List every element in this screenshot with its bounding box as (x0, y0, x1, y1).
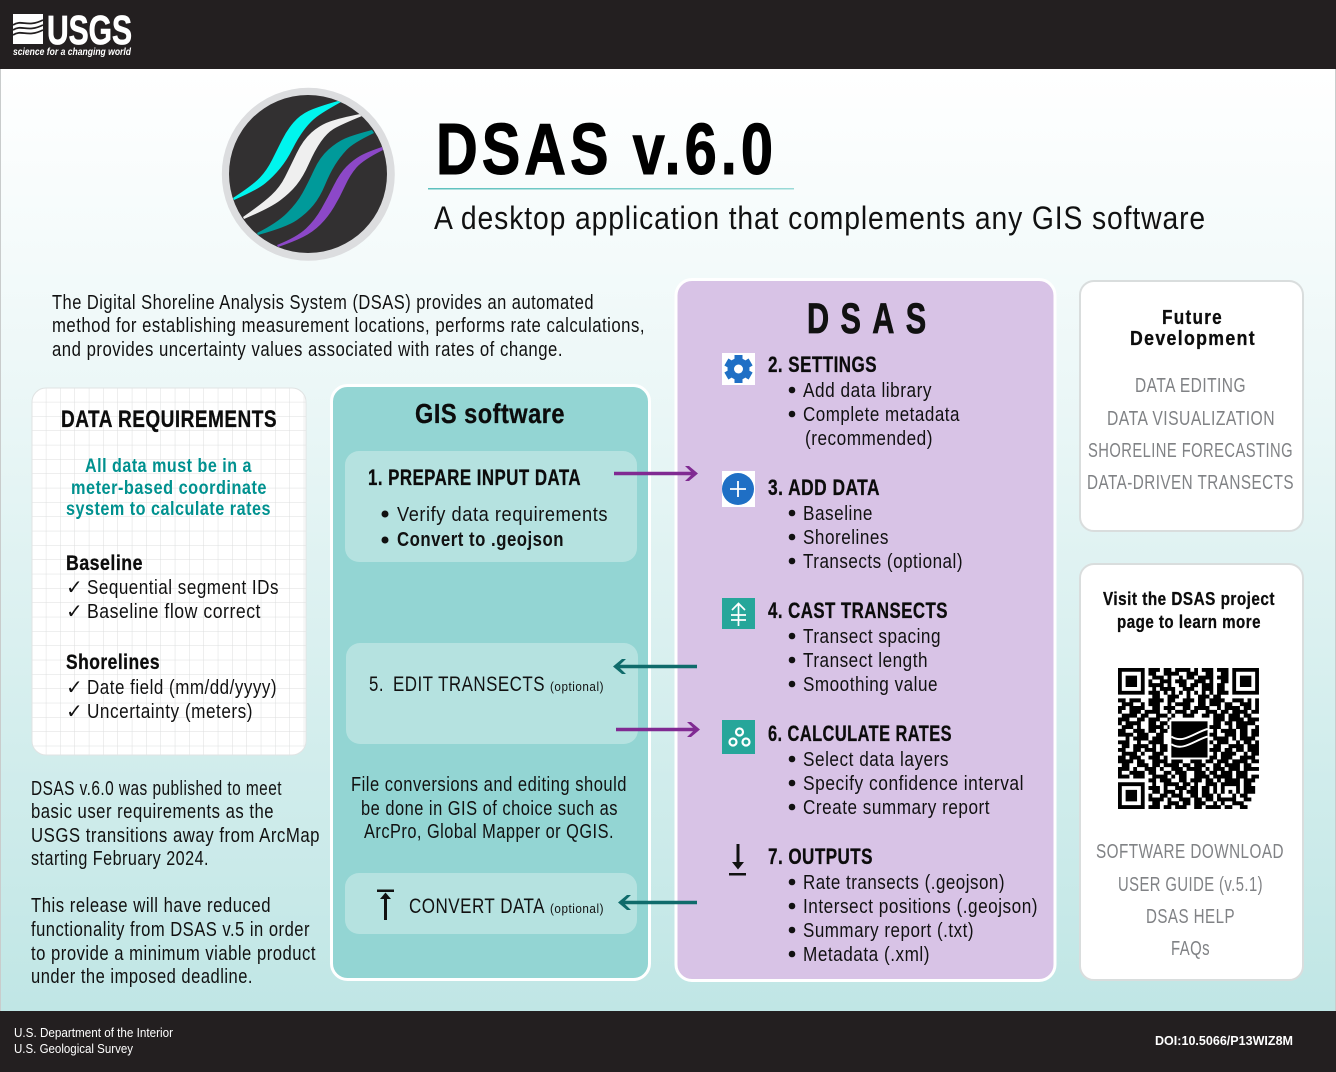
step 6: calculate rates: Select data layers (803, 749, 949, 771)
shorelines requirements: Uncertainty (meters) (87, 701, 253, 723)
arrow: edited transects to calculate rates (616, 722, 700, 737)
shorelines requirements (66, 651, 277, 723)
baseline requirements (66, 552, 279, 623)
convert data: CONVERT DATA (409, 895, 545, 918)
panel: DSAS (676, 280, 1055, 980)
step 2: settings: 2. SETTINGS (768, 352, 877, 377)
release note text: under the imposed deadline. (31, 966, 253, 988)
step 5: edit transects (346, 643, 638, 744)
step 4: cast transects: Transect spacing (803, 626, 941, 648)
icon: calculate cluster (722, 720, 755, 754)
step 3: add data: Baseline (803, 503, 873, 525)
heading: visit project page: page to learn more (1117, 612, 1261, 632)
coordinate system note: All data must be in a (85, 456, 252, 477)
step 3: add data: 3. ADD DATA (768, 475, 880, 500)
step 5: edit transects: 5. (369, 673, 384, 696)
conversion note: be done in GIS of choice such as (361, 798, 618, 820)
conversion note: File conversions and editing should (351, 774, 627, 796)
baseline requirements: ✓ (66, 601, 83, 623)
step 5: edit transects: (optional) (550, 679, 604, 694)
USGS wordmark: USGS (47, 7, 132, 53)
heading: data requirements: DATA REQUIREMENTS (61, 406, 277, 433)
step 1: prepare input data: Verify data requirements (397, 504, 608, 526)
department credit: U.S. Department of the Interior (14, 1026, 173, 1040)
step 7: outputs: Intersect positions (.geojson) (803, 896, 1038, 918)
subtitle: A desktop application that complements any GIS software (434, 200, 1206, 236)
step 3: add data: Transects (optional) (803, 551, 963, 573)
heading: future development: Future (1162, 307, 1223, 329)
heading: visit project page: Visit the DSAS project (1103, 589, 1275, 609)
step 6: calculate rates: Create summary report (803, 797, 990, 819)
heading: future development (1130, 307, 1256, 350)
release note text: DSAS v.6.0 was published to meet (31, 778, 282, 800)
icon: upload arrow (377, 890, 394, 920)
future feature list: DATA VISUALIZATION (1107, 408, 1275, 430)
baseline requirements: ✓ (66, 577, 83, 599)
step 7: outputs: 7. OUTPUTS (768, 844, 873, 869)
step 1: prepare input data: Convert to .geojson (397, 529, 564, 551)
future feature list (1087, 375, 1294, 494)
conversion note: ArcPro, Global Mapper or QGIS. (364, 821, 614, 843)
step 5: edit transects: EDIT TRANSECTS (393, 673, 545, 696)
coordinate system note (66, 456, 271, 520)
release note text (31, 778, 320, 988)
step 7: outputs (729, 844, 1038, 966)
QR center mark (1169, 719, 1209, 759)
project links list: SOFTWARE DOWNLOAD (1096, 841, 1284, 863)
step 7: outputs: Summary report (.txt) (803, 920, 974, 942)
panel: future development (1080, 281, 1303, 531)
step 2: settings: Add data library (803, 380, 932, 402)
step 4: cast transects: Smoothing value (803, 674, 938, 696)
step 4: cast transects: 4. CAST TRANSECTS (768, 598, 948, 623)
release note text: to provide a minimum viable product (31, 943, 316, 965)
project links list (1096, 841, 1284, 960)
shorelines requirements: ✓ (66, 701, 83, 723)
intro paragraph: The Digital Shoreline Analysis System (DSAS) provides an automated (52, 292, 594, 314)
shorelines requirements: Shorelines (66, 651, 160, 674)
USGS tagline: science for a changing world (13, 46, 131, 58)
title underline (428, 188, 794, 190)
project links list: FAQs (1171, 938, 1210, 960)
heading: future development: Development (1130, 328, 1256, 350)
step 2: settings (722, 352, 960, 450)
footer bar (0, 1011, 1336, 1072)
release note text: basic user requirements as the (31, 801, 274, 823)
QR code (1118, 670, 1263, 807)
future feature list: DATA EDITING (1135, 375, 1246, 397)
shorelines requirements: Date field (mm/dd/yyyy) (87, 677, 277, 699)
arrow: cast transects to edit transects (613, 659, 697, 674)
step 3: add data (722, 471, 963, 573)
intro paragraph: method for establishing measurement locations, performs rate calculations, (52, 315, 645, 337)
arrow: prepared data to add data (614, 466, 698, 481)
title: DSAS v.6.0 (436, 110, 777, 190)
heading: visit project page (1103, 589, 1275, 632)
release note text: USGS transitions away from ArcMap (31, 825, 320, 847)
baseline requirements: Sequential segment IDs (87, 577, 279, 599)
conversion note (351, 774, 627, 843)
release note text: starting February 2024. (31, 848, 209, 870)
step 2: settings: Complete metadata (803, 404, 960, 426)
step 6: calculate rates (722, 720, 1024, 819)
step 6: calculate rates: Specify confidence interval (803, 773, 1024, 795)
panel: GIS software (332, 386, 650, 980)
step 7: outputs: Rate transects (.geojson) (803, 872, 1005, 894)
coordinate system note: meter-based coordinate (71, 478, 267, 499)
intro paragraph: and provides uncertainty values associated with rates of change. (52, 339, 563, 361)
release note text: This release will have reduced (31, 895, 271, 917)
convert data (345, 873, 637, 934)
step 1: prepare input data: 1. PREPARE INPUT DATA (368, 465, 581, 490)
step 3: add data: Shorelines (803, 527, 889, 549)
baseline requirements: Baseline flow correct (87, 601, 261, 623)
department credit (14, 1026, 173, 1056)
icon: download arrow (729, 844, 746, 876)
heading: DSAS: DSAS (807, 295, 938, 343)
icon: USGS wave mark (13, 14, 43, 44)
arrow: outputs to convert data (618, 895, 697, 910)
release note text: functionality from DSAS v.5 in order (31, 919, 310, 941)
icon: add button (722, 471, 755, 507)
icon: transects (722, 598, 755, 629)
project links list: DSAS HELP (1146, 906, 1235, 928)
coordinate system note: system to calculate rates (66, 499, 271, 520)
shorelines requirements: ✓ (66, 677, 83, 699)
panel: data requirements (32, 388, 306, 755)
heading: GIS software: GIS software (415, 398, 565, 429)
convert data: (optional) (550, 901, 604, 916)
step 7: outputs: Metadata (.xml) (803, 944, 930, 966)
intro paragraph (52, 292, 645, 361)
step 6: calculate rates: 6. CALCULATE RATES (768, 721, 952, 746)
icon: DSAS logo (222, 88, 395, 261)
project links list: USER GUIDE (v.5.1) (1118, 874, 1263, 896)
baseline requirements: Baseline (66, 552, 143, 575)
icon: gear (722, 353, 755, 385)
step 4: cast transects: Transect length (803, 650, 928, 672)
panel: project links (1080, 564, 1303, 980)
step 2: settings: (recommended) (805, 428, 933, 450)
step 1: prepare input data (345, 451, 637, 562)
step 4: cast transects (722, 598, 948, 696)
DOI: DOI:10.5066/P13WIZ8M (1155, 1033, 1293, 1048)
department credit: U.S. Geological Survey (14, 1042, 134, 1056)
header bar with USGS logo (0, 0, 1336, 69)
